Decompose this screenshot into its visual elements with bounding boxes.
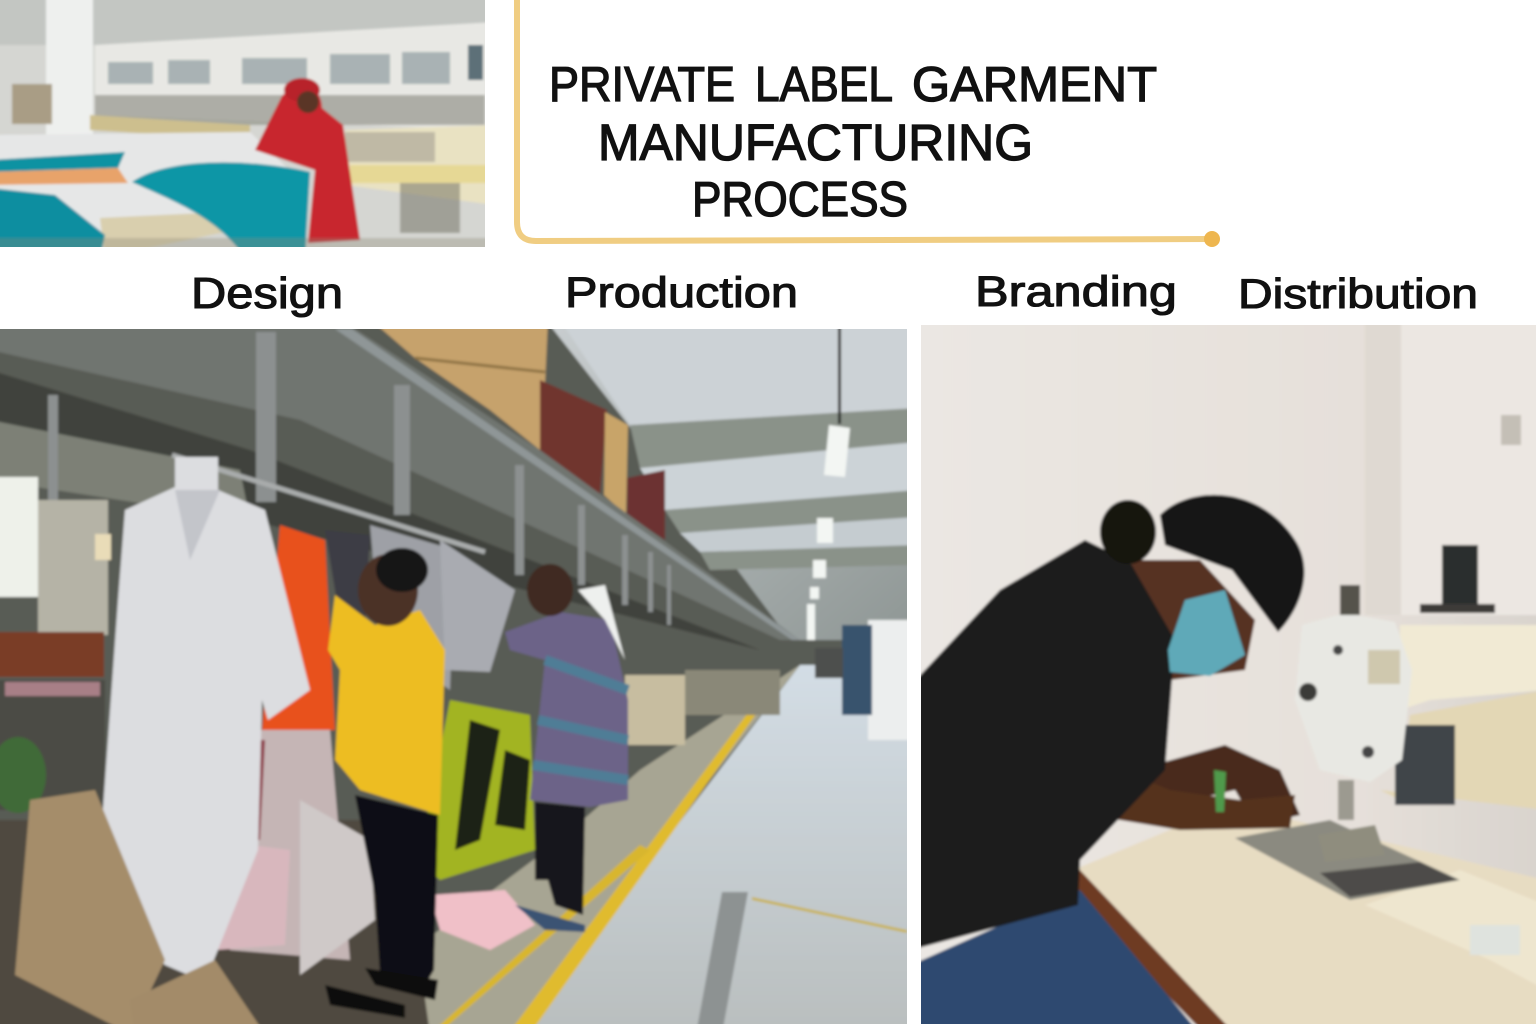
boxes on shelf bbox=[378, 329, 550, 451]
title bbox=[549, 58, 1157, 227]
stage labels: Production bbox=[565, 269, 798, 317]
photo: cutting room bbox=[0, 0, 495, 257]
hanging rack garments bbox=[210, 525, 535, 975]
stage labels: Design bbox=[191, 269, 343, 318]
title: LABEL bbox=[755, 58, 893, 112]
stage labels bbox=[191, 268, 1478, 318]
sewing table bbox=[1078, 805, 1536, 1024]
sewing machine bbox=[1295, 545, 1536, 862]
seamstress bbox=[911, 495, 1304, 1024]
photo: seamstress at sewing machine bbox=[911, 315, 1536, 1024]
torso black shirt bbox=[911, 540, 1175, 950]
worker in plaid coat bbox=[505, 564, 628, 932]
distant machinery and tables bbox=[625, 675, 685, 745]
rail bbox=[172, 455, 485, 552]
photo: garment rack in factory aisle bbox=[0, 319, 917, 1024]
pallet bbox=[15, 790, 165, 1024]
title: PRIVATE bbox=[549, 58, 735, 112]
arm bbox=[1150, 744, 1301, 818]
hair bun and cap bbox=[1100, 500, 1156, 564]
title: PROCESS bbox=[692, 173, 908, 227]
title: GARMENT bbox=[912, 58, 1157, 112]
left window wall bbox=[0, 477, 38, 597]
worker in yellow bbox=[325, 548, 445, 1018]
shelf structure bbox=[0, 319, 800, 640]
stage labels: Distribution bbox=[1238, 270, 1478, 317]
jeans bbox=[911, 890, 1200, 1024]
white dress on mannequin bbox=[96, 457, 310, 982]
bracelet bbox=[1214, 770, 1226, 812]
mask bbox=[1168, 590, 1245, 676]
lights bbox=[807, 425, 850, 640]
neck and face bbox=[1130, 560, 1255, 680]
floor bbox=[510, 665, 917, 1024]
ceiling bbox=[545, 319, 917, 640]
title accent line bbox=[517, 0, 1220, 247]
title: MANUFACTURING bbox=[598, 114, 1033, 171]
stage labels: Branding bbox=[975, 268, 1177, 316]
